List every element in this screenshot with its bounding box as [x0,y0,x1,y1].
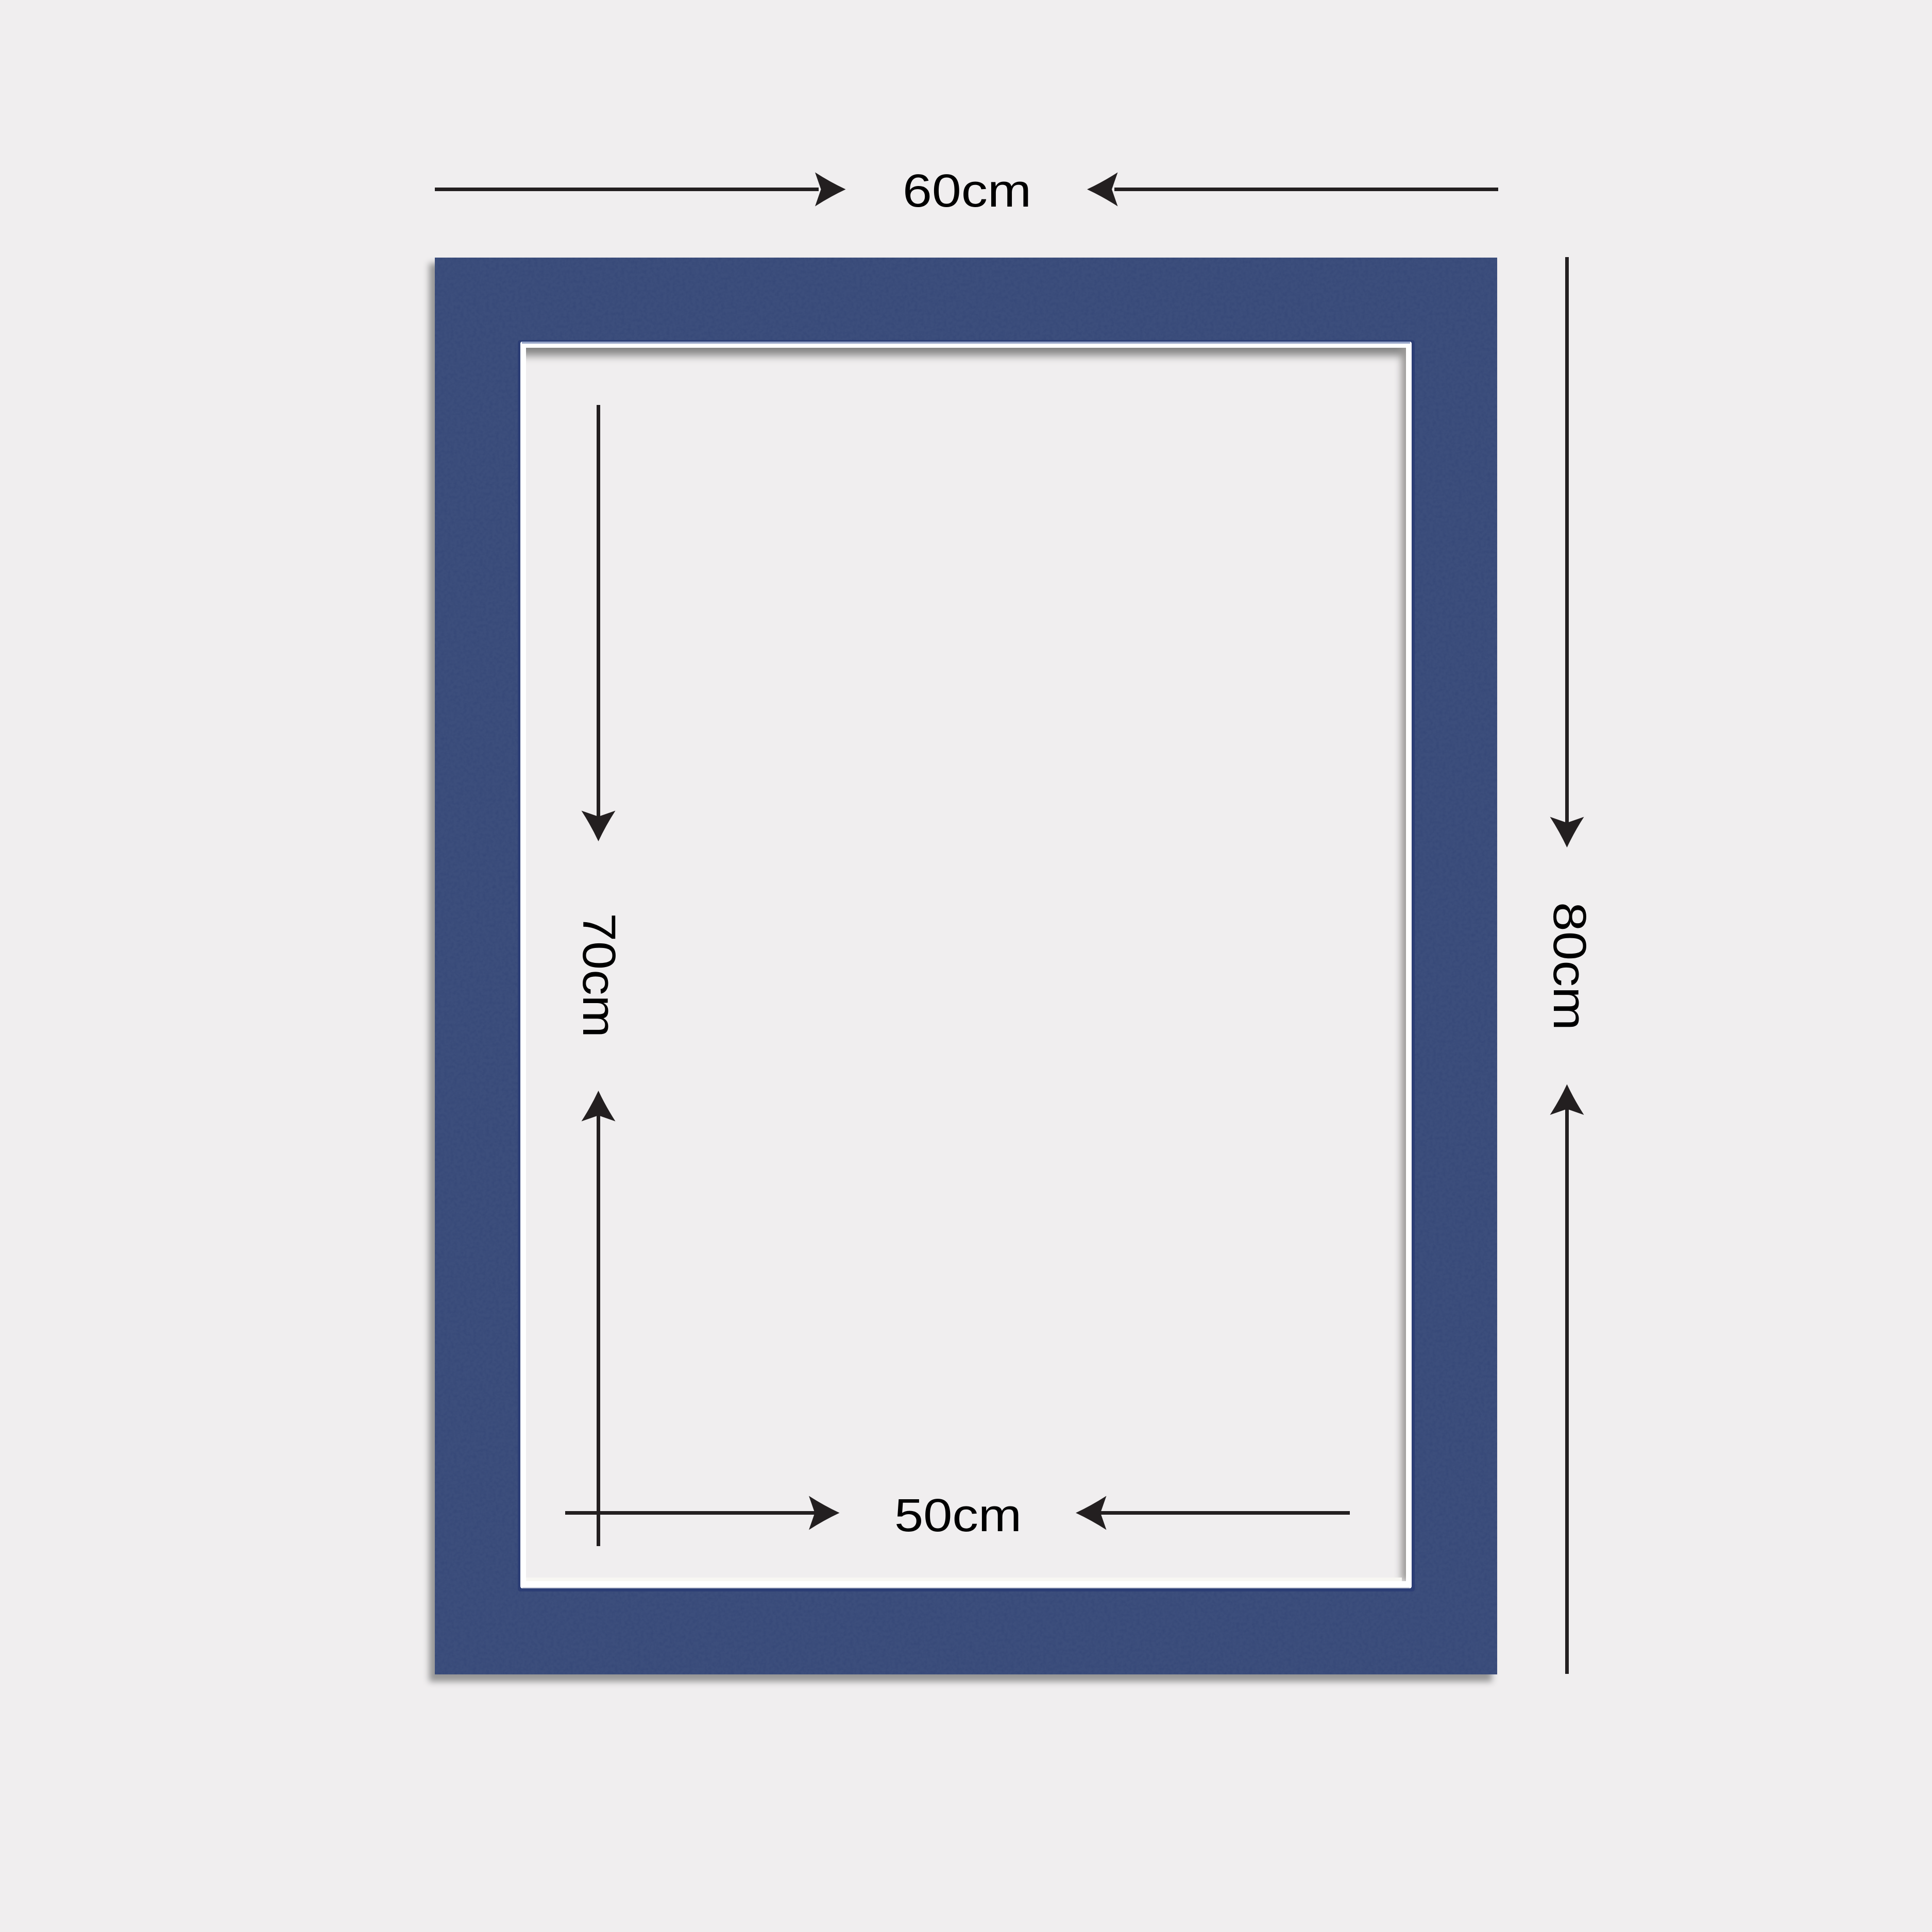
opening inner shadow [515,330,1418,1581]
arrow: bottom pointing up [581,1091,615,1546]
white bevel [520,342,1412,1588]
arrow: left pointing right [565,1496,840,1530]
bevel top highlight [522,342,1410,344]
dimension: outer height 80cm [1544,257,1595,1674]
mat paper grain [435,258,1497,1674]
mat drop shadow [429,263,1492,1682]
dimension: inner width 50cm [565,1490,1350,1541]
dimension: inner height 70cm [573,405,624,1546]
bevel bottom edge [522,1587,1410,1588]
dimension: outer width 60cm [435,165,1498,217]
arrow: top pointing down [581,405,615,841]
label: 80cm: 80cm [1544,902,1595,1030]
arrow: right pointing left [1087,172,1498,206]
label: 60cm: 60cm [903,165,1031,217]
arrow: right pointing left [1076,1496,1350,1530]
label: 70cm: 70cm [573,913,624,1038]
arrow: left pointing right [435,172,846,206]
label: 50cm: 50cm [894,1490,1022,1541]
opening dark cut edge [518,340,1415,1591]
arrow: bottom pointing up [1550,1084,1584,1674]
opening interior [526,348,1406,1581]
panel: blue mat board [429,258,1497,1682]
mat surface [435,258,1497,1674]
arrow: top pointing down [1550,257,1584,848]
